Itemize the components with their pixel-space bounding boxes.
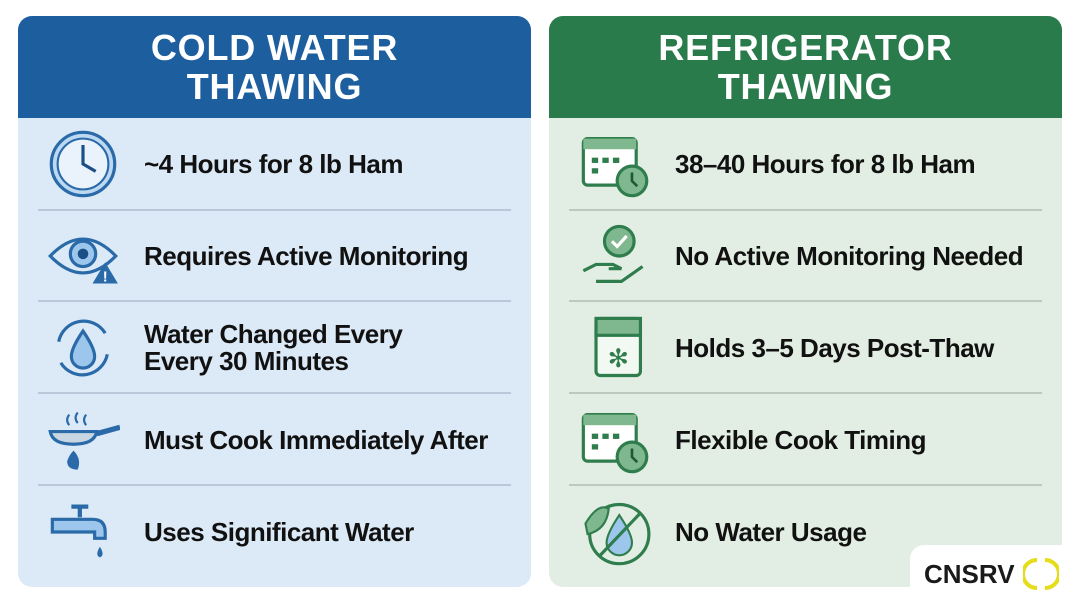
row: holds 3-5 days: Holds 3–5 Days Post-Thaw bbox=[675, 332, 994, 362]
icon: water cycle bbox=[57, 320, 109, 376]
logo: CNSRV bbox=[910, 545, 1080, 603]
row: no water bbox=[584, 502, 866, 566]
icon: no water bbox=[584, 502, 650, 566]
row: water changed bbox=[57, 319, 403, 376]
icon: pan with flame bbox=[48, 412, 120, 470]
row: no water: No Water Usage bbox=[675, 516, 866, 546]
row: 4 hours: ~4 Hours for 8 lb Ham bbox=[144, 148, 403, 178]
row: no monitoring bbox=[582, 224, 1023, 283]
icon: fridge: ✻ bbox=[608, 345, 629, 373]
panel: refrigerator thawing bbox=[549, 16, 1062, 587]
row: no monitoring: No Active Monitoring Needed bbox=[675, 240, 1023, 270]
icon: faucet bbox=[50, 504, 107, 558]
row: cook immediately bbox=[48, 412, 488, 470]
icon: fridge bbox=[594, 316, 642, 378]
row: flexible timing: Flexible Cook Timing bbox=[675, 424, 926, 454]
row: water changed: Every 30 Minutes bbox=[144, 346, 348, 376]
row: uses water bbox=[50, 504, 414, 558]
heading: cold water: COLD WATER bbox=[151, 27, 398, 68]
row: holds 3-5 days bbox=[594, 316, 994, 378]
icon: hand check bbox=[582, 224, 644, 283]
icon: calendar clock bbox=[582, 137, 648, 198]
row: 38-40 hours: 38–40 Hours for 8 lb Ham bbox=[675, 148, 975, 178]
heading: cold water bbox=[18, 16, 531, 118]
row: flexible timing bbox=[582, 413, 926, 474]
row: cook immediately: Must Cook Immediately After bbox=[144, 424, 488, 454]
icon: clock bbox=[50, 130, 116, 198]
row: 38-40 hours bbox=[582, 137, 975, 198]
heading: refrigerator: REFRIGERATOR bbox=[658, 27, 953, 68]
icon: eye warning bbox=[48, 238, 118, 285]
icon: calendar clock bbox=[582, 413, 648, 474]
row: monitoring: Requires Active Monitoring bbox=[144, 240, 468, 270]
row: 4 hours bbox=[50, 130, 403, 198]
icon: eye warning: ! bbox=[103, 269, 108, 285]
heading: refrigerator bbox=[549, 16, 1062, 118]
row: monitoring bbox=[48, 238, 468, 285]
row: uses water: Uses Significant Water bbox=[144, 516, 414, 546]
row: water changed: Water Changed Every bbox=[144, 319, 402, 349]
heading: cold water: THAWING bbox=[187, 66, 362, 107]
logo: CNSRV: CNSRV bbox=[924, 558, 1015, 588]
heading: refrigerator: THAWING bbox=[718, 66, 893, 107]
panel: cold water thawing bbox=[18, 16, 531, 587]
